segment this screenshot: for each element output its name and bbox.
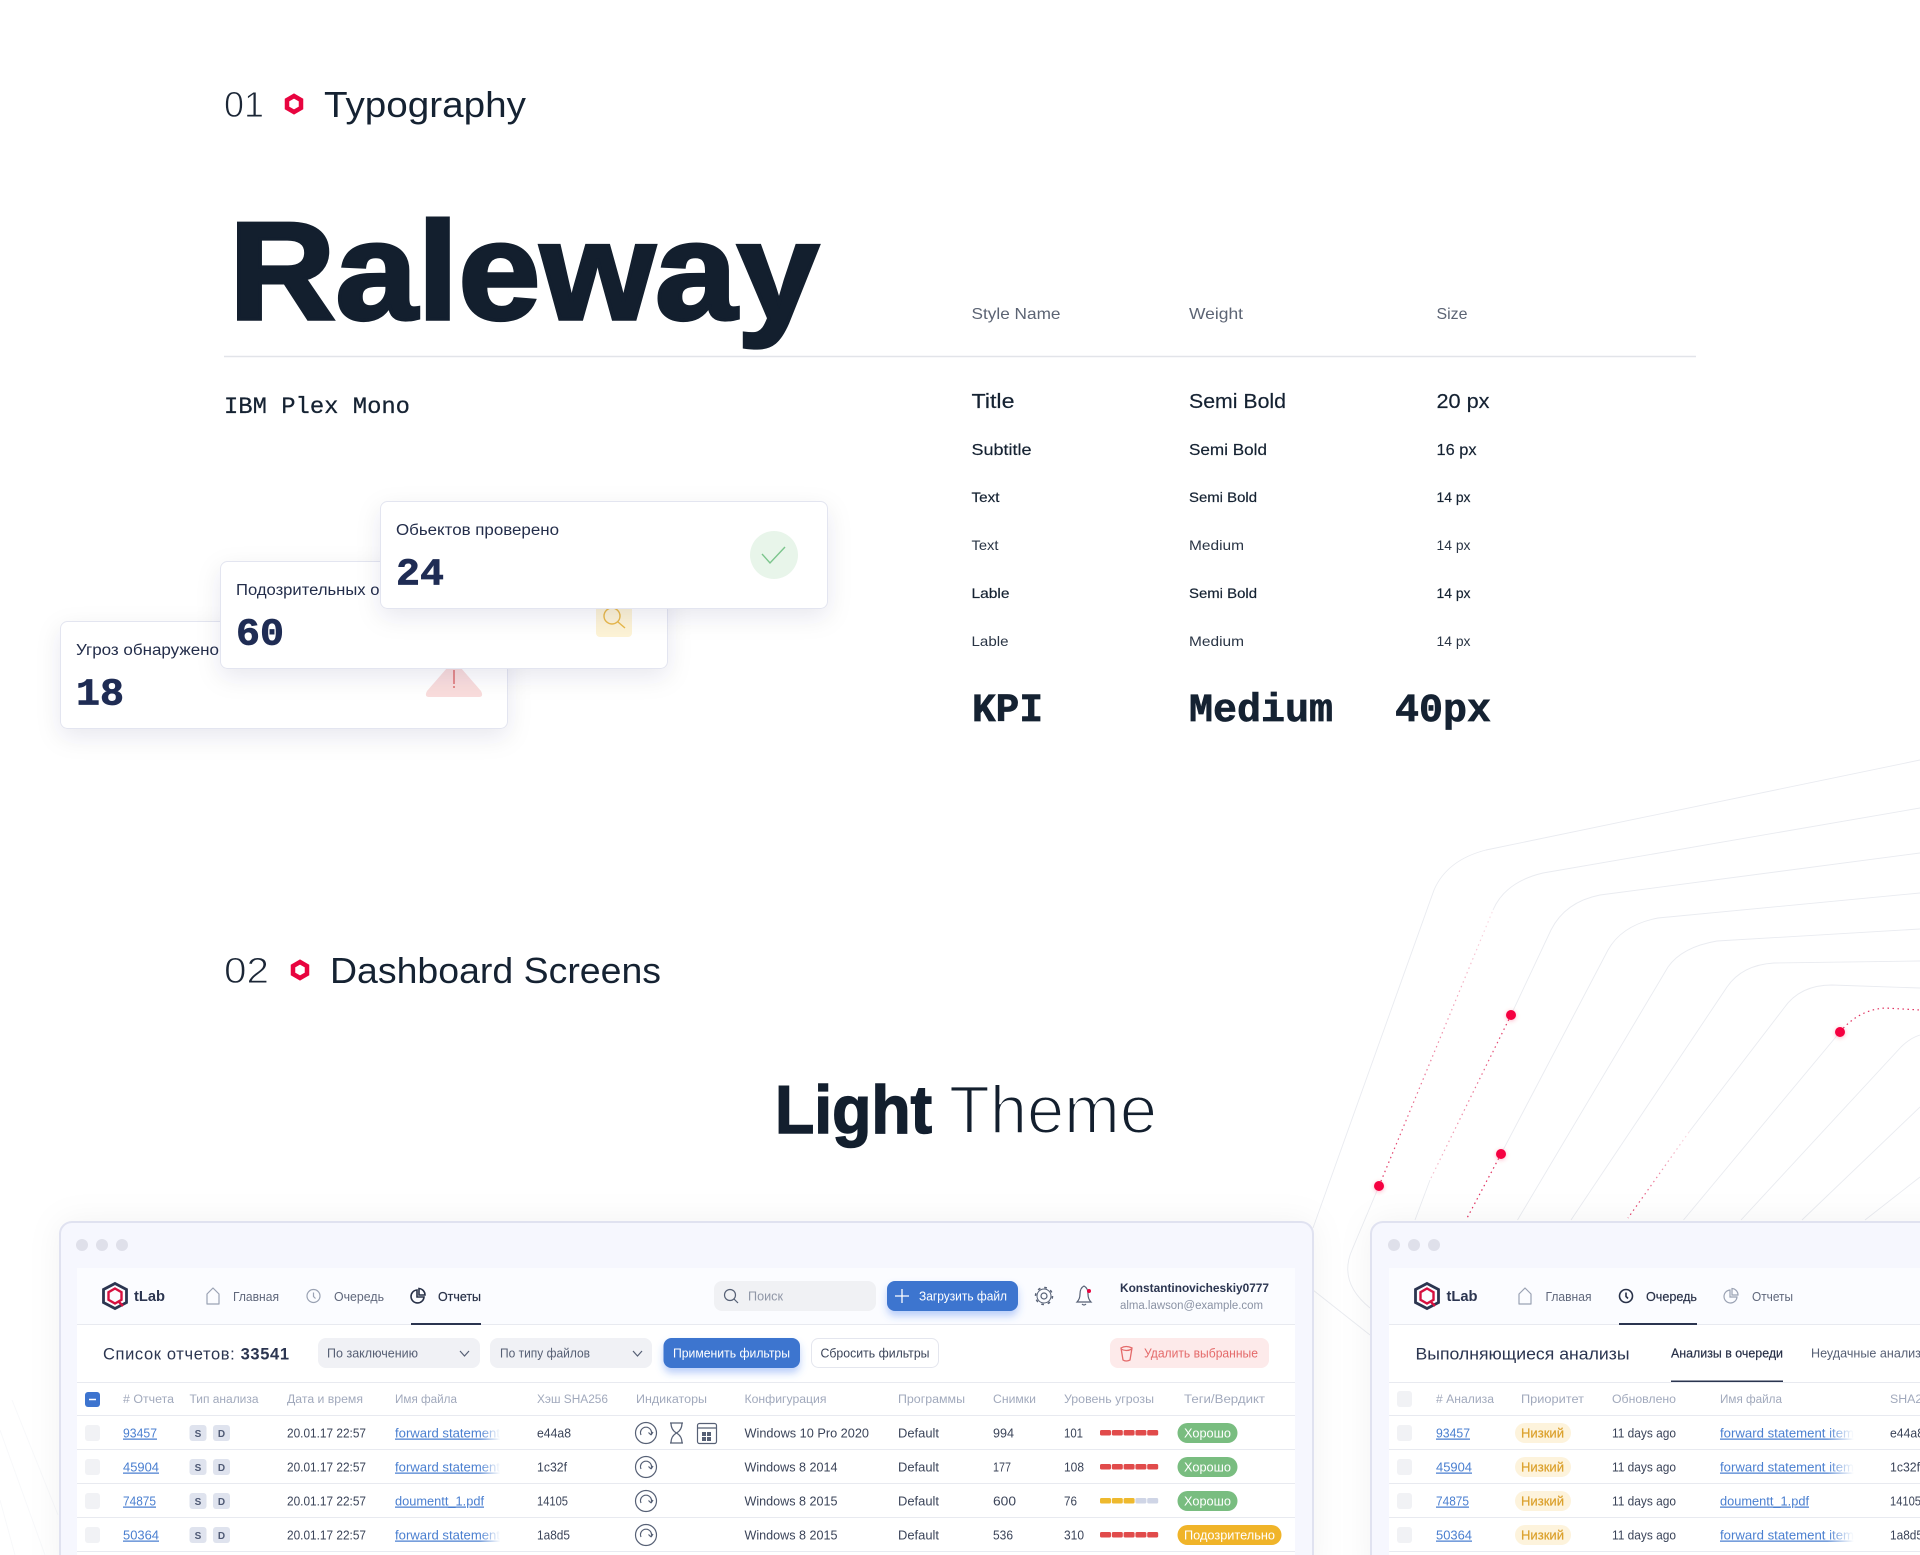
nav item: queue active: Очередь	[1646, 1290, 1697, 1304]
queue table	[1389, 1391, 1920, 1552]
row: Text medium: Text	[972, 537, 999, 553]
nav item: home: Главная	[1546, 1290, 1592, 1304]
user info	[1120, 1281, 1269, 1312]
row 74875: 14105	[537, 1494, 568, 1508]
title: Light Theme	[775, 1072, 1157, 1148]
row 45904: 1c32f	[1890, 1460, 1920, 1474]
nav item: home: Главная	[233, 1290, 279, 1304]
row: Subtitle: Subtitle	[972, 442, 1032, 459]
row 74875: 20.01.17 22:57	[287, 1494, 366, 1508]
row 93457: Windows 10 Pro 2020	[744, 1426, 869, 1440]
nav item: reports	[1724, 1288, 1793, 1304]
row 50364	[1389, 1525, 1920, 1552]
KPI card: threats found	[60, 622, 508, 728]
icon: warning triangle	[426, 660, 482, 697]
button: upload file: Загрузить файл	[919, 1290, 1007, 1304]
row 74875	[1389, 1491, 1920, 1518]
icon: magnifier tile	[596, 601, 632, 637]
row 50364: Default	[898, 1528, 940, 1542]
button: apply filters: Применить фильтры	[673, 1346, 790, 1360]
section heading: 02 Dashboard Screens: 02	[224, 950, 269, 991]
row: Text medium: 14 px	[1436, 537, 1470, 553]
row 45904: 45904	[123, 1460, 159, 1474]
table header row: # Анализа	[1436, 1394, 1495, 1406]
row 93457: 11 days ago	[1612, 1426, 1676, 1440]
background: line pattern	[0, 760, 1920, 1555]
button: apply filters	[664, 1338, 800, 1368]
row 45904: Хорошо	[1184, 1460, 1231, 1474]
table header: Style Name	[972, 306, 1061, 323]
table header	[972, 306, 1468, 323]
icon: notification bell	[1077, 1286, 1091, 1305]
row: Lable medium	[972, 633, 1470, 649]
row 74875	[77, 1490, 1295, 1518]
toolbar	[1389, 1346, 1920, 1382]
row 93457: Хорошо	[1184, 1426, 1231, 1440]
row 50364: 310	[1064, 1528, 1084, 1542]
text: IBM Plex Mono specimen: IBM Plex Mono	[224, 394, 410, 420]
reports table	[77, 1392, 1295, 1552]
row: Text medium: Medium	[1189, 537, 1244, 553]
table header row	[77, 1392, 1295, 1416]
row 93457: 93457	[1436, 1426, 1470, 1440]
row 45904: 1c32f	[537, 1460, 568, 1474]
KPI card: threats found: 18	[76, 674, 124, 716]
row: Subtitle: Semi Bold	[1189, 442, 1267, 459]
logo: tLab: tLab	[134, 1289, 165, 1305]
row 93457: 93457	[123, 1426, 157, 1440]
window frame	[1371, 1222, 1920, 1555]
row: Text medium	[972, 537, 1470, 553]
row: Text semi bold: Semi Bold	[1189, 489, 1257, 505]
user info: alma.lawson@example.com	[1120, 1300, 1263, 1312]
title: Light Theme: Light	[775, 1072, 932, 1148]
table header row: Снимки	[993, 1394, 1036, 1406]
table header row: Теги/Вердикт	[1184, 1394, 1266, 1406]
nav item: reports active	[411, 1288, 481, 1325]
table header row: Дата и время	[287, 1394, 363, 1406]
filter: by file type: По типу файлов	[500, 1346, 590, 1360]
row: Title: Title	[972, 391, 1014, 413]
row 45904: forward statement	[395, 1460, 501, 1474]
section heading: 01 Typography: Typography	[324, 84, 526, 125]
table header row: Индикаторы	[636, 1394, 707, 1406]
filter: by file type	[490, 1338, 652, 1368]
table header row: Имя файла	[1720, 1394, 1783, 1406]
table header row: Имя файла	[395, 1394, 458, 1406]
nav item: queue: Очередь	[334, 1290, 384, 1304]
row 50364: Windows 8 2015	[744, 1528, 838, 1542]
row 50364: D	[218, 1531, 225, 1542]
row: KPI	[972, 689, 1491, 734]
row 50364: 1a8d5	[537, 1528, 570, 1542]
row 74875: doumentt_1.pdf	[395, 1494, 485, 1508]
divider rule	[224, 356, 1696, 358]
KPI card: suspicious objects: 60	[236, 614, 284, 656]
row 50364: 11 days ago	[1612, 1528, 1676, 1542]
window frame	[60, 1222, 1313, 1555]
row: Lable semi bold: 14 px	[1436, 585, 1470, 601]
row: Title: Semi Bold	[1189, 391, 1286, 413]
table header row: # Отчета	[123, 1394, 175, 1406]
KPI card: objects checked: 24	[396, 554, 444, 596]
nav item: home	[207, 1288, 279, 1304]
row: Lable medium: 14 px	[1436, 633, 1470, 649]
row 74875: Хорошо	[1184, 1494, 1231, 1508]
row 50364: 50364	[123, 1528, 159, 1542]
row 50364: Подозрительно	[1184, 1528, 1275, 1542]
dashboard window: reports list	[60, 1222, 1313, 1555]
dashboard window: analysis queue	[1371, 1222, 1920, 1555]
table header row: Тип анализа	[190, 1394, 259, 1406]
button: delete selected: Удалить выбранные	[1144, 1346, 1258, 1360]
row 50364	[77, 1524, 1295, 1552]
navigation bar	[1416, 1284, 1793, 1325]
row 50364: 536	[993, 1528, 1013, 1542]
row: KPI: Medium	[1189, 689, 1333, 734]
row 74875: 76	[1064, 1494, 1077, 1508]
row 93457: Низкий	[1521, 1426, 1564, 1440]
KPI card: suspicious objects	[220, 562, 668, 668]
section heading: 01 Typography	[224, 84, 526, 125]
filter: by verdict: По заключению	[327, 1346, 418, 1360]
row: Text semi bold: Text	[972, 489, 1000, 505]
logo: tLab	[1416, 1284, 1478, 1308]
tab: queued analyses	[1671, 1346, 1783, 1382]
row 45904: S	[195, 1463, 202, 1474]
row 93457: 101	[1064, 1426, 1083, 1440]
row: Title	[972, 391, 1490, 413]
title: Light Theme: Theme	[949, 1072, 1157, 1148]
row 93457: D	[218, 1429, 225, 1440]
row 74875: Windows 8 2015	[744, 1494, 838, 1508]
row 45904: Windows 8 2014	[744, 1460, 838, 1474]
row 93457	[77, 1422, 1295, 1450]
row 74875: 74875	[1436, 1494, 1469, 1508]
row: Lable semi bold: Semi Bold	[1189, 585, 1257, 601]
row: Lable medium: Lable	[972, 633, 1009, 649]
row 45904: 45904	[1436, 1460, 1472, 1474]
search field	[714, 1281, 876, 1311]
row 45904: 108	[1064, 1460, 1084, 1474]
search field: Поиск	[748, 1290, 784, 1304]
row: Lable semi bold	[972, 585, 1470, 601]
icon: settings gear	[1036, 1288, 1052, 1304]
row 50364: forward statement item	[1720, 1528, 1854, 1542]
row 50364: forward statement	[395, 1528, 501, 1542]
button: upload file	[887, 1281, 1018, 1311]
KPI card: suspicious objects: Подозрительных объектов	[236, 582, 441, 599]
user info: Konstantinovicheskiy0777	[1120, 1281, 1269, 1295]
row 45904	[1389, 1457, 1920, 1484]
row 93457	[1389, 1423, 1920, 1450]
row: KPI: 40px	[1395, 689, 1491, 734]
row 74875: 74875	[123, 1494, 156, 1508]
row: Title: 20 px	[1436, 391, 1490, 413]
row 45904: Низкий	[1521, 1460, 1564, 1474]
tab: queued analyses: Анализы в очереди	[1671, 1346, 1783, 1360]
row 74875: doumentt_1.pdf	[1720, 1494, 1810, 1508]
row 45904: D	[218, 1463, 225, 1474]
KPI card: threats found: Угроз обнаружено	[76, 642, 219, 659]
row: KPI: KPI	[972, 689, 1043, 734]
button: reset filters	[812, 1338, 938, 1368]
nav item: reports: Отчеты	[1752, 1290, 1793, 1304]
section heading: 01 Typography: 01	[224, 84, 264, 125]
row: Subtitle: 16 px	[1436, 442, 1476, 459]
row: Lable medium: Medium	[1189, 633, 1244, 649]
row 45904: 11 days ago	[1612, 1460, 1676, 1474]
section heading: 02 Dashboard Screens: Dashboard Screens	[330, 950, 661, 991]
heading: reports count: Список отчетов: 33541	[103, 1346, 289, 1364]
table header: Weight	[1189, 306, 1244, 323]
row 45904: Default	[898, 1460, 940, 1474]
row 93457: forward statement	[395, 1426, 501, 1440]
table header row: Конфигурация	[744, 1394, 826, 1406]
table header row: Обновлено	[1612, 1394, 1676, 1406]
row 93457: S	[195, 1429, 202, 1440]
KPI card: objects checked	[380, 502, 828, 608]
icon: check circle	[750, 531, 798, 579]
row 45904: 20.01.17 22:57	[287, 1460, 366, 1474]
row 45904: forward statement item	[1720, 1460, 1854, 1474]
row: Lable semi bold: Lable	[972, 585, 1010, 601]
row 74875: 600	[993, 1494, 1016, 1508]
row 50364: S	[195, 1531, 202, 1542]
button: reset filters: Сбросить фильтры	[820, 1346, 930, 1360]
row 93457: e44a8	[537, 1426, 571, 1440]
row 50364: 20.01.17 22:57	[287, 1528, 366, 1542]
title: Raleway specimen: Raleway	[229, 194, 819, 349]
type styles table	[972, 306, 1491, 734]
row 93457: forward statement item	[1720, 1426, 1854, 1440]
row 45904: 177	[993, 1460, 1011, 1474]
nav item: reports active: Отчеты	[438, 1290, 481, 1304]
row 50364: 50364	[1436, 1528, 1472, 1542]
row 74875: 11 days ago	[1612, 1494, 1676, 1508]
row 74875: Низкий	[1521, 1494, 1564, 1508]
row: Text semi bold: 14 px	[1436, 489, 1470, 505]
row 93457: 20.01.17 22:57	[287, 1426, 366, 1440]
heading: running analyses: Выполняющиеся анализы	[1416, 1346, 1630, 1364]
row 74875: S	[195, 1497, 202, 1508]
row 93457: 994	[993, 1426, 1014, 1440]
logo: tLab: tLab	[1446, 1289, 1478, 1305]
filter: by verdict	[318, 1338, 480, 1368]
row 45904	[77, 1456, 1295, 1484]
toolbar	[77, 1338, 1295, 1382]
table header row: Уровень угрозы	[1064, 1394, 1154, 1406]
table header row: Приоритет	[1521, 1394, 1585, 1406]
button: delete selected	[1110, 1338, 1269, 1368]
nav item: queue active	[1619, 1290, 1697, 1325]
logo: tLab	[104, 1284, 165, 1308]
table header row	[1389, 1391, 1920, 1416]
nav item: queue	[307, 1290, 384, 1304]
nav item: home	[1519, 1288, 1592, 1304]
row 74875: Default	[898, 1494, 940, 1508]
table header row: Хэш SHA256	[537, 1394, 608, 1406]
row: Subtitle	[972, 442, 1476, 459]
row: Text semi bold	[972, 489, 1470, 505]
row 74875: D	[218, 1497, 225, 1508]
navigation bar	[104, 1281, 1269, 1325]
table header: Size	[1436, 306, 1468, 323]
table header row: Программы	[898, 1394, 965, 1406]
KPI card: objects checked: Обьектов проверено	[396, 522, 559, 539]
row 50364: Низкий	[1521, 1528, 1564, 1542]
row 93457: Default	[898, 1426, 940, 1440]
